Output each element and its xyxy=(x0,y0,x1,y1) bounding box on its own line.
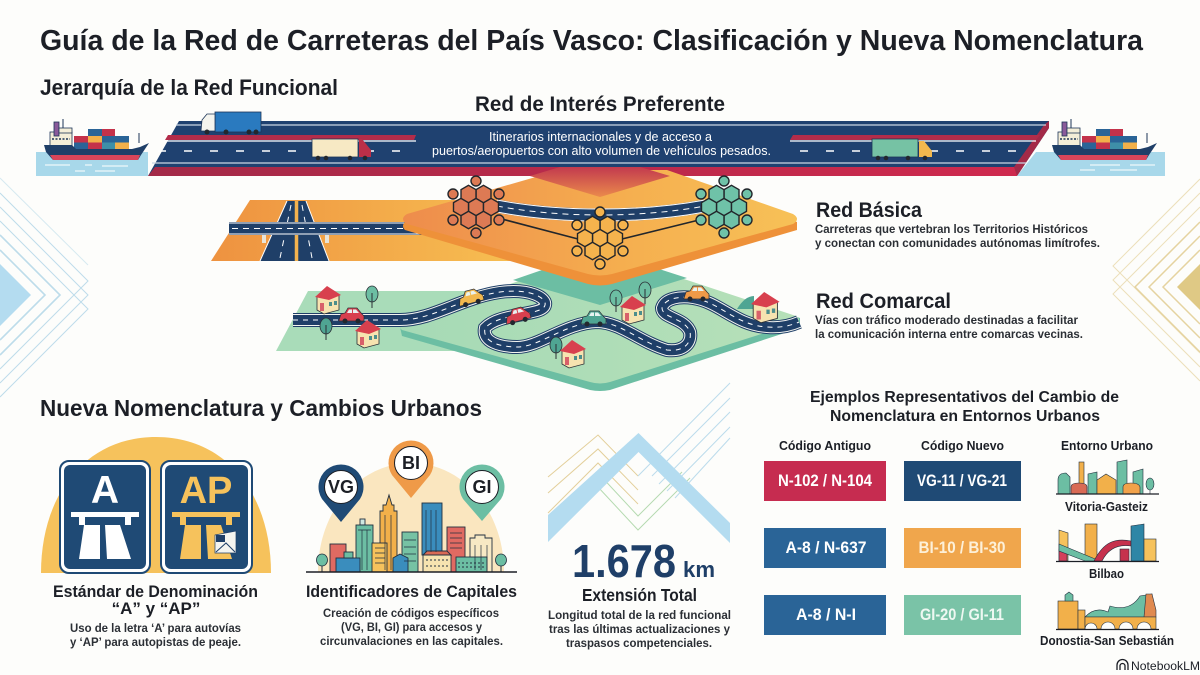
icon: left cargo ship xyxy=(44,119,149,160)
table heading: Nomenclatura en Entornos Urbanos xyxy=(830,408,1100,425)
text: Red de Interés Preferente description xyxy=(432,130,771,158)
icon: city skyline with location pins xyxy=(306,440,517,572)
icon: right water xyxy=(1017,152,1165,176)
text block: Estándar de Denominación: y ‘AP’ para autopistas de peaje. xyxy=(70,635,241,649)
label: Donostia-San Sebastián: Donostia-San Sebastián xyxy=(1040,634,1174,648)
logo: NotebookLM: NotebookLM xyxy=(1131,661,1200,673)
table heading xyxy=(810,389,1119,425)
text block: Red Comarcal xyxy=(815,290,1083,341)
text block: Identificadores de Capitales xyxy=(306,582,517,648)
text block: Red Básica: y conectan con comunidades autónomas limítrofes. xyxy=(815,236,1100,250)
stat: 1.678 km extension xyxy=(548,535,731,650)
text block: Red Comarcal: Red Comarcal xyxy=(816,290,951,313)
heading: Red de Interés Preferente: Red de Interés Preferente xyxy=(475,93,725,116)
title: Guía de la Red de Carreteras del País Vasco: Clasificación y Nueva Nomenclatura xyxy=(40,25,1144,57)
text block: Identificadores de Capitales: (VG, BI, GI) para accesos y xyxy=(341,620,482,634)
text block: Estándar de Denominación: “A” y “AP” xyxy=(112,599,200,618)
text block: Red Básica xyxy=(815,199,1100,250)
text block: Identificadores de Capitales: Creación de códigos específicos xyxy=(323,606,499,620)
panel: orange strip Red Básica backdrop xyxy=(211,200,520,261)
logo: NotebookLM xyxy=(1117,660,1200,673)
code row 2 xyxy=(764,528,1021,568)
decorative left chevrons xyxy=(0,178,88,397)
stat: 1.678 km extension: 1.678 xyxy=(572,535,676,587)
icon: A and AP road signs on sun xyxy=(41,437,271,573)
icon: Donostia-San Sebastián skyline xyxy=(1056,592,1159,630)
icon: blue truck xyxy=(201,112,261,134)
icon: city skyline with location pins: BI xyxy=(402,453,420,473)
text block: Estándar de Denominación xyxy=(53,582,258,649)
panel: green strip Red Comarcal backdrop xyxy=(276,291,500,351)
section heading: nomenclature: Nueva Nomenclatura y Cambios Urbanos xyxy=(40,395,482,421)
panel: top road Red de Interés Preferente xyxy=(148,121,1049,176)
table column headers: Código Nuevo xyxy=(921,439,1004,453)
stat: 1.678 km extension: tras las últimas actualizaciones y xyxy=(549,622,730,636)
layer: Red Comarcal platform xyxy=(400,250,800,391)
icon: right cargo ship xyxy=(1052,119,1157,160)
text block: Red Básica: Carreteras que vertebran los Territorios Históricos xyxy=(815,222,1088,236)
text block: Red Comarcal: la comunicación interna entre comarcas vecinas. xyxy=(815,327,1083,341)
table column headers: Entorno Urbano xyxy=(1061,439,1153,453)
text block: Identificadores de Capitales: circunvalaciones en las capitales. xyxy=(320,634,503,648)
text block: Estándar de Denominación: Uso de la letra ‘A’ para autovías xyxy=(70,621,241,635)
icon: city skyline with location pins: VG xyxy=(328,477,354,497)
text block: Identificadores de Capitales: Identificadores de Capitales xyxy=(306,582,517,601)
icons: villages, trees and cars on Comarcal road xyxy=(315,282,780,368)
layer: Red Básica platform with nodes xyxy=(403,167,797,286)
icon: A and AP road signs on sun: AP xyxy=(180,470,232,512)
icon: Bilbao skyline xyxy=(1056,524,1159,562)
label: Bilbao: Bilbao xyxy=(1089,567,1124,581)
icon: green truck xyxy=(872,139,932,160)
road: winding Comarcal road xyxy=(293,291,799,350)
code row 3 xyxy=(764,595,1021,635)
icon: mountain chevron with lines xyxy=(548,383,730,543)
text block: Estándar de Denominación: Estándar de Denominación xyxy=(53,582,258,601)
code row 3: GI-20 / GI-11 xyxy=(920,606,1004,624)
code row 2: BI-10 / BI-30 xyxy=(918,539,1006,557)
icon: city skyline with location pins: GI xyxy=(472,477,492,497)
code row 1: N-102 / N-104 xyxy=(778,472,873,490)
label: Vitoria-Gasteiz: Vitoria-Gasteiz xyxy=(1065,500,1148,514)
section heading: hierarchy: Jerarquía de la Red Funcional xyxy=(40,75,338,100)
text block: Red Básica: Red Básica xyxy=(816,199,922,222)
stat: 1.678 km extension: traspasos competenciales. xyxy=(566,636,712,650)
table column headers: Código Antiguo xyxy=(779,439,871,453)
icon: Vitoria-Gasteiz skyline xyxy=(1056,460,1159,494)
code row 2: A-8 / N-637 xyxy=(786,539,866,557)
text: Red de Interés Preferente description: Itinerarios internacionales y de acceso a xyxy=(489,130,712,144)
code row 3: A-8 / N-I xyxy=(796,606,856,624)
decorative right chevrons xyxy=(1113,179,1200,381)
stat: 1.678 km extension: Longitud total de la red funcional xyxy=(548,608,731,622)
text: Red de Interés Preferente description: puertos/aeropuertos con alto volumen de vehículos pesados. xyxy=(432,144,771,158)
stat: 1.678 km extension: Extensión Total xyxy=(582,585,697,605)
table heading: Ejemplos Representativos del Cambio de xyxy=(810,389,1119,406)
icon: cream truck xyxy=(312,139,371,160)
code row 1 xyxy=(764,461,1021,501)
icon: left water xyxy=(36,152,148,176)
stat: 1.678 km extension: km xyxy=(683,557,715,582)
icon: A and AP road signs on sun: A xyxy=(91,469,119,512)
text block: Red Comarcal: Vías con tráfico moderado destinadas a facilitar xyxy=(815,313,1078,327)
code row 1: VG-11 / VG-21 xyxy=(917,472,1007,490)
table column headers xyxy=(779,439,1153,453)
